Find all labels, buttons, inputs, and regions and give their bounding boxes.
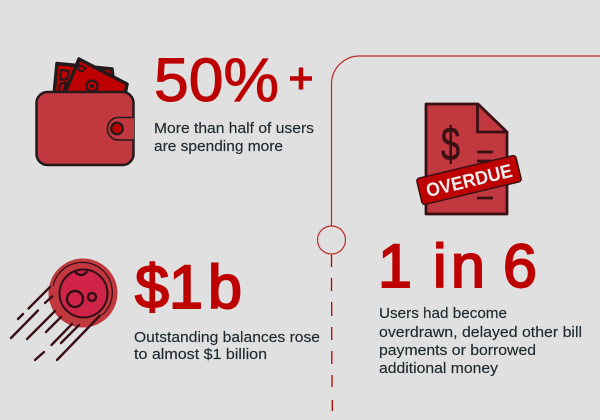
text: users had become overdrawn: additional money [379,361,499,377]
text: more than half of users: are spending more [154,139,283,155]
plus sign [290,68,312,90]
icon: overdue bill [416,104,522,214]
icon: wallet body [36,92,134,165]
icon: dollar sign: $ [441,117,460,170]
icon: wallet clasp [107,118,134,140]
stat: 50% plus [154,46,312,114]
text: users had become overdrawn: payments or borrowed [379,343,536,359]
comet trail [11,287,100,360]
icon: wallet with banknotes [36,59,134,165]
comet halo [48,258,118,328]
icon: front banknote [64,59,127,95]
text: outstanding balances [134,330,320,363]
stat: $1b: $1b [135,253,242,321]
icon: back banknote [54,64,115,95]
text: users had become overdrawn: Users had become [379,306,507,322]
icon: document [426,104,507,214]
heading: 50%: 50% [154,46,279,114]
text: users had become overdrawn [379,306,582,377]
comet core [53,262,112,318]
text: outstanding balances: Outstanding balances rose [134,330,320,346]
icon: comet [11,258,118,360]
stat: 1 in 6: 1 in 6 [378,232,537,300]
stamp: overdue: OVERDUE [424,161,515,202]
text: more than half of users [154,121,314,155]
text: users had become overdrawn: overdrawn, delayed other bill [379,325,582,341]
text: more than half of users: More than half of users [154,121,314,137]
connector line with node circle [318,56,600,411]
text: outstanding balances: to almost $1 billion [134,347,267,363]
